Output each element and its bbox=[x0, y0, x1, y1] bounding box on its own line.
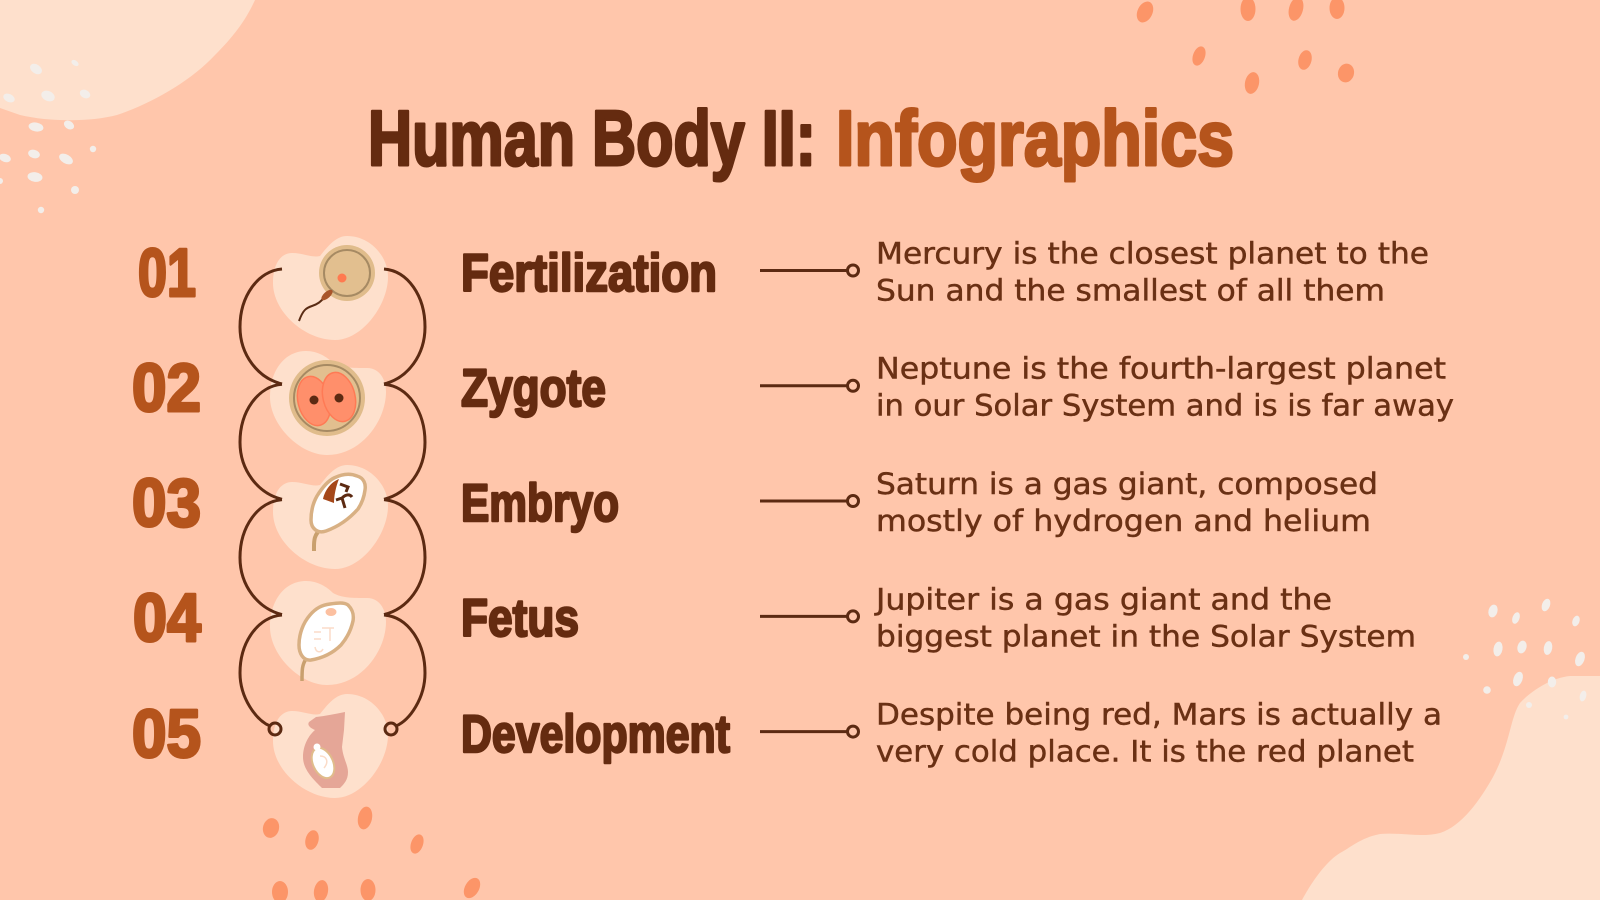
numbers column: 01 bbox=[138, 235, 196, 311]
description 3: mostly of hydrogen and helium bbox=[876, 504, 1371, 538]
headings: Zygote bbox=[461, 359, 606, 418]
decorative drops: bottom bbox=[261, 805, 484, 900]
headings: Fetus bbox=[461, 589, 579, 648]
description 4: biggest planet in the Solar System bbox=[876, 620, 1416, 654]
headings: Embryo bbox=[461, 474, 619, 533]
description 3 bbox=[876, 467, 1378, 538]
icon backing blobs bbox=[270, 236, 388, 798]
description 2: in our Solar System and is is far away bbox=[876, 388, 1454, 422]
icon: development pregnant body bbox=[303, 712, 348, 788]
decorative dots: bottom right bbox=[1463, 598, 1588, 719]
connector lines with end nodes bbox=[760, 265, 858, 737]
headings bbox=[461, 244, 730, 764]
headings: Development bbox=[461, 705, 730, 764]
headings: Fertilization bbox=[461, 244, 717, 303]
description 4 bbox=[874, 582, 1416, 654]
description 5 bbox=[876, 698, 1442, 768]
icon: fertilization egg and sperm bbox=[299, 245, 375, 321]
description 2: Neptune is the fourth-largest planet bbox=[876, 352, 1446, 386]
icon: embryo bbox=[311, 474, 365, 551]
title bbox=[368, 94, 1234, 182]
decorative blob: top left bbox=[0, 0, 255, 120]
description 1: Sun and the smallest of all them bbox=[876, 274, 1385, 308]
description 2 bbox=[876, 352, 1454, 422]
description 5: very cold place. It is the red planet bbox=[876, 734, 1414, 768]
description 4: Jupiter is a gas giant and the bbox=[874, 582, 1332, 616]
numbers column: 03 bbox=[132, 465, 201, 541]
icon: zygote bbox=[289, 360, 365, 436]
decorative drops: top right bbox=[1134, 0, 1356, 95]
description 1: Mercury is the closest planet to the bbox=[876, 236, 1429, 270]
numbers column: 05 bbox=[132, 696, 201, 772]
numbers column bbox=[132, 235, 201, 772]
decorative blob: bottom right bbox=[1302, 676, 1600, 900]
description 5: Despite being red, Mars is actually a bbox=[876, 698, 1442, 732]
decorative dots: top left bbox=[0, 59, 96, 213]
title: Infographics bbox=[836, 94, 1234, 182]
numbers column: 02 bbox=[132, 350, 201, 426]
description 3: Saturn is a gas giant, composed bbox=[876, 467, 1378, 501]
description 1 bbox=[876, 236, 1429, 308]
connecting chain curves bbox=[240, 269, 425, 735]
numbers column: 04 bbox=[133, 580, 201, 656]
title: Human Body II: bbox=[368, 94, 816, 182]
icon: fetus bbox=[299, 603, 353, 681]
